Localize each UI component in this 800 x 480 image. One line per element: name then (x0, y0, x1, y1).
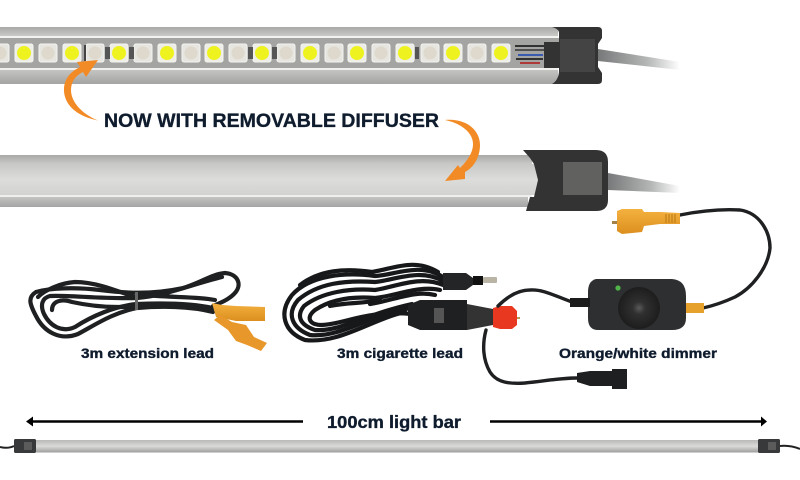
LED light bar with diffuser removed (0, 27, 680, 84)
end cap (544, 27, 602, 84)
dimmer body (588, 279, 686, 330)
orange connector one (212, 303, 265, 321)
orange/white dimmer (484, 209, 770, 389)
orange connector two (214, 315, 267, 351)
red plug tip (493, 306, 517, 329)
coiled black cable (30, 273, 239, 336)
LED chips (0, 44, 510, 62)
length arrow right (490, 416, 767, 426)
black strain relief (570, 298, 590, 307)
power connector (443, 273, 473, 290)
orange strain relief (686, 303, 704, 313)
length arrow left (26, 416, 303, 426)
cable (608, 173, 680, 193)
3m cigarette lead (284, 265, 520, 340)
green indicator (615, 285, 621, 291)
label: dimmer: Orange/white dimmer (559, 346, 718, 361)
cables (484, 210, 770, 383)
end cap (523, 150, 608, 211)
orange connector (612, 221, 617, 224)
plug body (408, 300, 467, 330)
black connector (577, 369, 627, 389)
curved orange arrow to diffuser (445, 120, 480, 181)
exposed wires (515, 46, 545, 63)
curved orange arrow to LEDs (64, 60, 98, 120)
LED light bar with diffuser fitted (0, 150, 680, 211)
cable (598, 49, 680, 70)
label: 3m extension lead: 3m extension lead (81, 346, 214, 361)
heading: NOW WITH REMOVABLE DIFFUSER (104, 110, 439, 132)
3m extension lead (30, 273, 267, 351)
dimmer knob (618, 287, 660, 329)
full 100cm light bar (0, 439, 800, 453)
coiled black cable (284, 265, 443, 340)
label: 3m cigarette lead: 3m cigarette lead (337, 346, 463, 361)
label: 100cm light bar: 100cm light bar (327, 412, 461, 432)
